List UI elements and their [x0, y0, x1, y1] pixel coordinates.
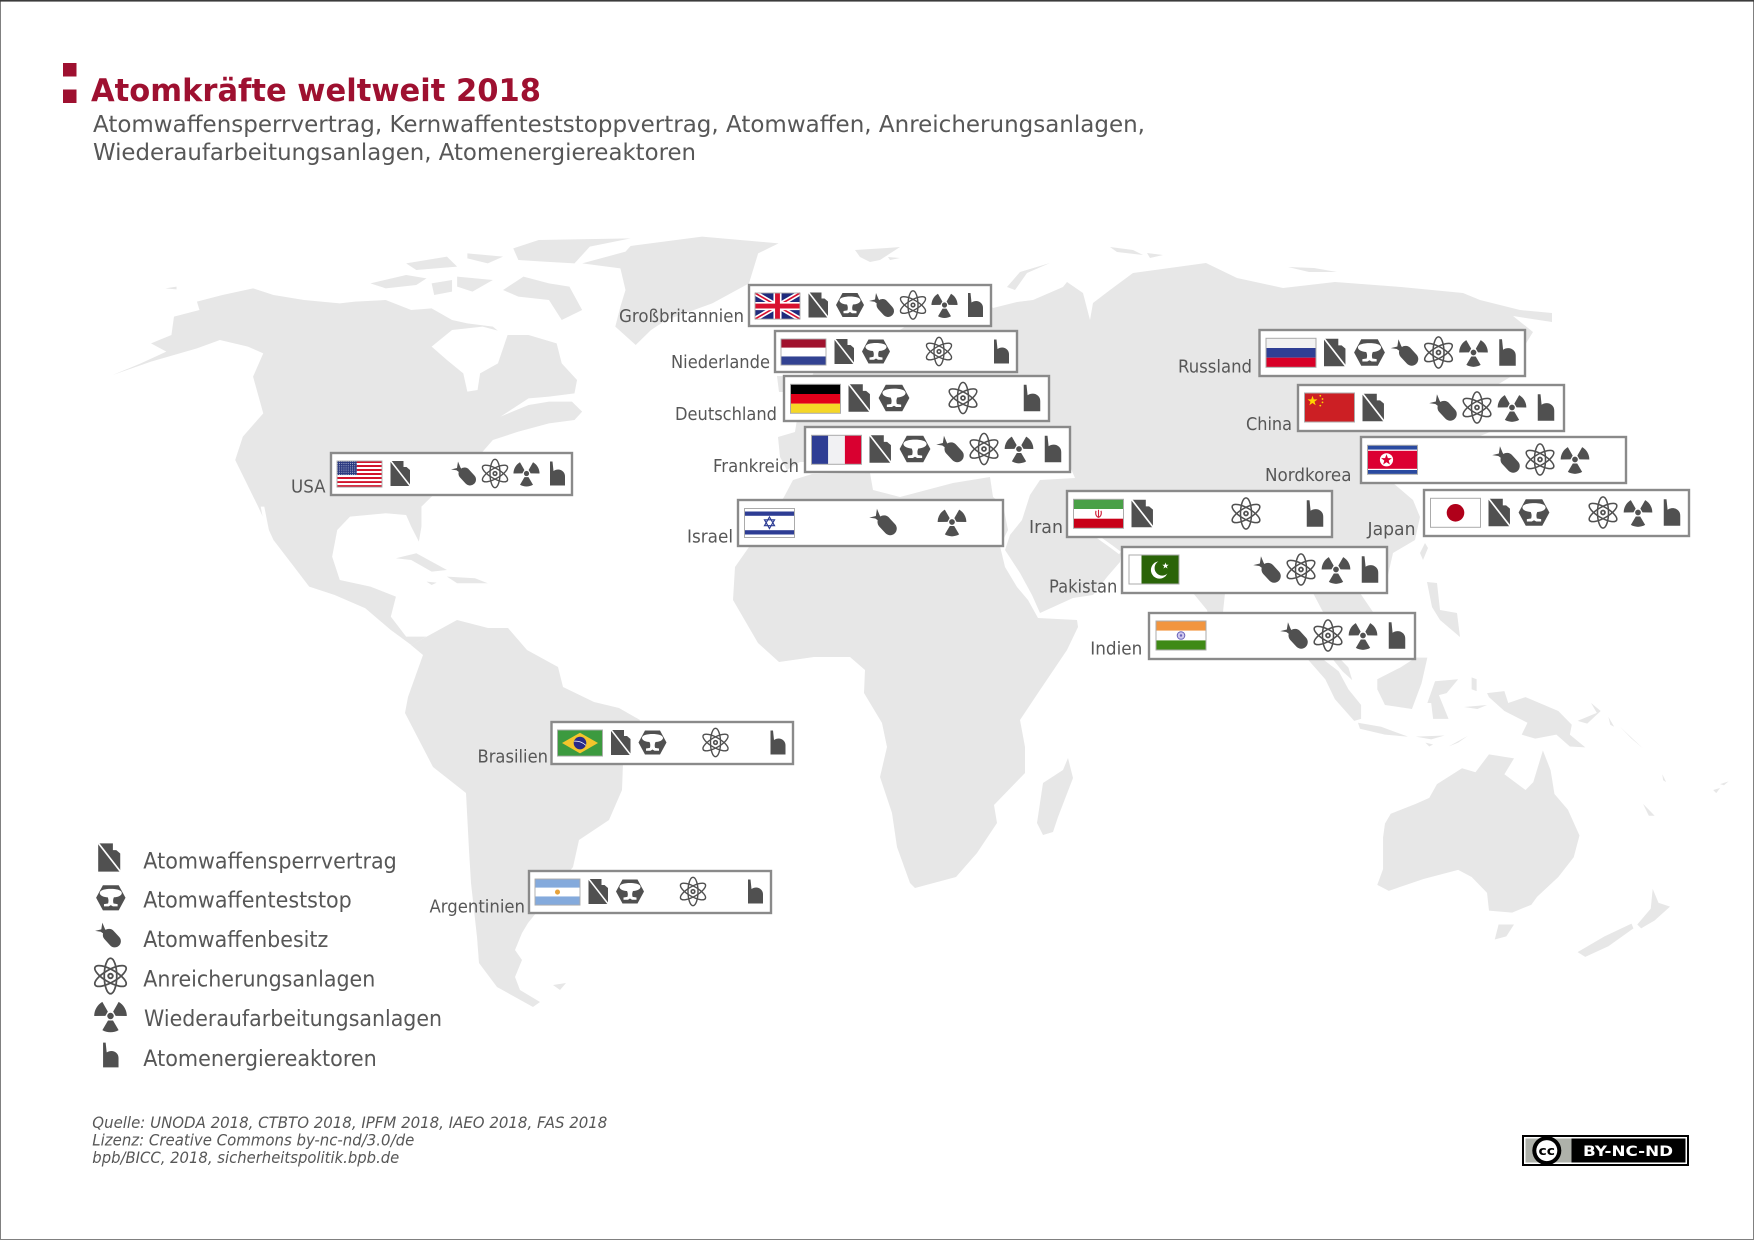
panel: USA: [291, 453, 572, 498]
flag and icons: [558, 728, 786, 757]
label: USA: [291, 478, 326, 498]
subtitle: Atomwaffensperrvertrag, Kernwaffenteststoppvertrag, Atomwaffen, Anreicherungsanlagen,: [93, 112, 1145, 138]
panel: Iran: [1029, 491, 1332, 538]
box: [1298, 385, 1564, 431]
panel: Israel: [687, 500, 1003, 548]
subtitle: Wiederaufarbeitungsanlagen, Atomenergiereaktoren: [93, 140, 696, 166]
box: [1260, 330, 1525, 376]
label: Großbritannien: [619, 307, 744, 327]
flag and icons: [1156, 620, 1405, 651]
box: [805, 427, 1070, 472]
legend: [92, 842, 442, 1072]
North America and Greenland: [113, 237, 779, 645]
subtitle: [93, 112, 1145, 166]
license badge: [1522, 1135, 1689, 1166]
legend text: Atomwaffenteststop: [143, 888, 352, 914]
label: Iran: [1029, 518, 1063, 538]
label: Nordkorea: [1265, 466, 1352, 486]
legend text: Atomenergiereaktoren: [143, 1047, 377, 1072]
box: [331, 453, 572, 495]
box: [1424, 490, 1689, 536]
flag and icons: [812, 433, 1061, 465]
license badge: BY-NC-ND: [1583, 1144, 1673, 1160]
flag and icons: [1266, 337, 1516, 368]
legend text: Wiederaufarbeitungsanlagen: [144, 1007, 442, 1032]
title: Atomkräfte weltweit 2018: [91, 73, 541, 109]
box: [775, 331, 1017, 372]
license badge: cc: [1538, 1143, 1555, 1158]
box: [1122, 547, 1387, 593]
icon: treaty: [98, 842, 121, 873]
panel: Argentinien: [430, 871, 771, 918]
Southeast Asia and Oceania: [1308, 658, 1729, 957]
label: China: [1246, 415, 1292, 435]
panel: Nordkorea: [1265, 437, 1626, 486]
title marker: [63, 63, 76, 103]
icon: reactor: [103, 1043, 119, 1067]
label: Argentinien: [430, 898, 525, 918]
label: Brasilien: [478, 748, 548, 768]
box: [1361, 437, 1626, 483]
panel: Pakistan: [1049, 547, 1387, 597]
flag and icons: [790, 382, 1040, 414]
flag and icons: [1129, 554, 1378, 585]
label: Russland: [1178, 358, 1252, 378]
Africa: [733, 473, 1078, 888]
panel: Brasilien: [478, 722, 793, 768]
label: Israel: [687, 528, 733, 548]
legend text: Atomwaffensperrvertrag: [143, 849, 397, 874]
icon: radiation: [92, 1001, 129, 1032]
panel: Indien: [1090, 613, 1415, 659]
legend text: Anreicherungsanlagen: [143, 968, 375, 993]
box: [738, 500, 1003, 546]
icon: test stop: [96, 885, 126, 910]
flag and icons: [755, 291, 983, 319]
flag and icons: [1074, 498, 1323, 529]
label: Japan: [1367, 520, 1416, 540]
source note: Lizenz: Creative Commons by-nc-nd/3.0/de: [92, 1130, 414, 1150]
legend text: Atomwaffenbesitz: [143, 928, 328, 953]
panel: Japan: [1367, 490, 1689, 540]
box: [529, 871, 771, 913]
flag and icons: [744, 508, 968, 538]
box: [1149, 613, 1415, 659]
flag and icons: [1304, 392, 1554, 423]
label: Frankreich: [713, 457, 799, 477]
label: Pakistan: [1049, 577, 1117, 597]
flag and icons: [781, 337, 1009, 366]
box: [1067, 491, 1332, 537]
flag and icons: [337, 459, 565, 488]
Eurasia: [778, 263, 1552, 655]
box: [552, 722, 793, 764]
label: Deutschland: [675, 405, 777, 425]
label: Indien: [1090, 639, 1142, 659]
source note: bpb/BICC, 2018, sicherheitspolitik.bpb.de: [92, 1148, 399, 1167]
source note: [92, 1113, 607, 1167]
box: [784, 376, 1049, 421]
panel: Niederlande: [671, 331, 1017, 373]
flag and icons: [1430, 497, 1680, 528]
panel: Frankreich: [713, 427, 1070, 477]
source note: Quelle: UNODA 2018, CTBTO 2018, IPFM 2018, IAEO 2018, FAS 2018: [92, 1113, 607, 1132]
South America: [405, 620, 640, 1007]
flag and icons: [1368, 444, 1591, 475]
flag and icons: [535, 877, 763, 906]
panel: Großbritannien: [619, 285, 991, 327]
icon: atom: [92, 958, 129, 994]
label: Niederlande: [671, 353, 770, 373]
box: [749, 285, 991, 326]
panel: Russland: [1178, 330, 1525, 378]
world map: [113, 237, 1729, 1007]
panel: China: [1246, 385, 1564, 435]
icon: bomb: [95, 923, 115, 941]
panel: Deutschland: [675, 376, 1049, 425]
